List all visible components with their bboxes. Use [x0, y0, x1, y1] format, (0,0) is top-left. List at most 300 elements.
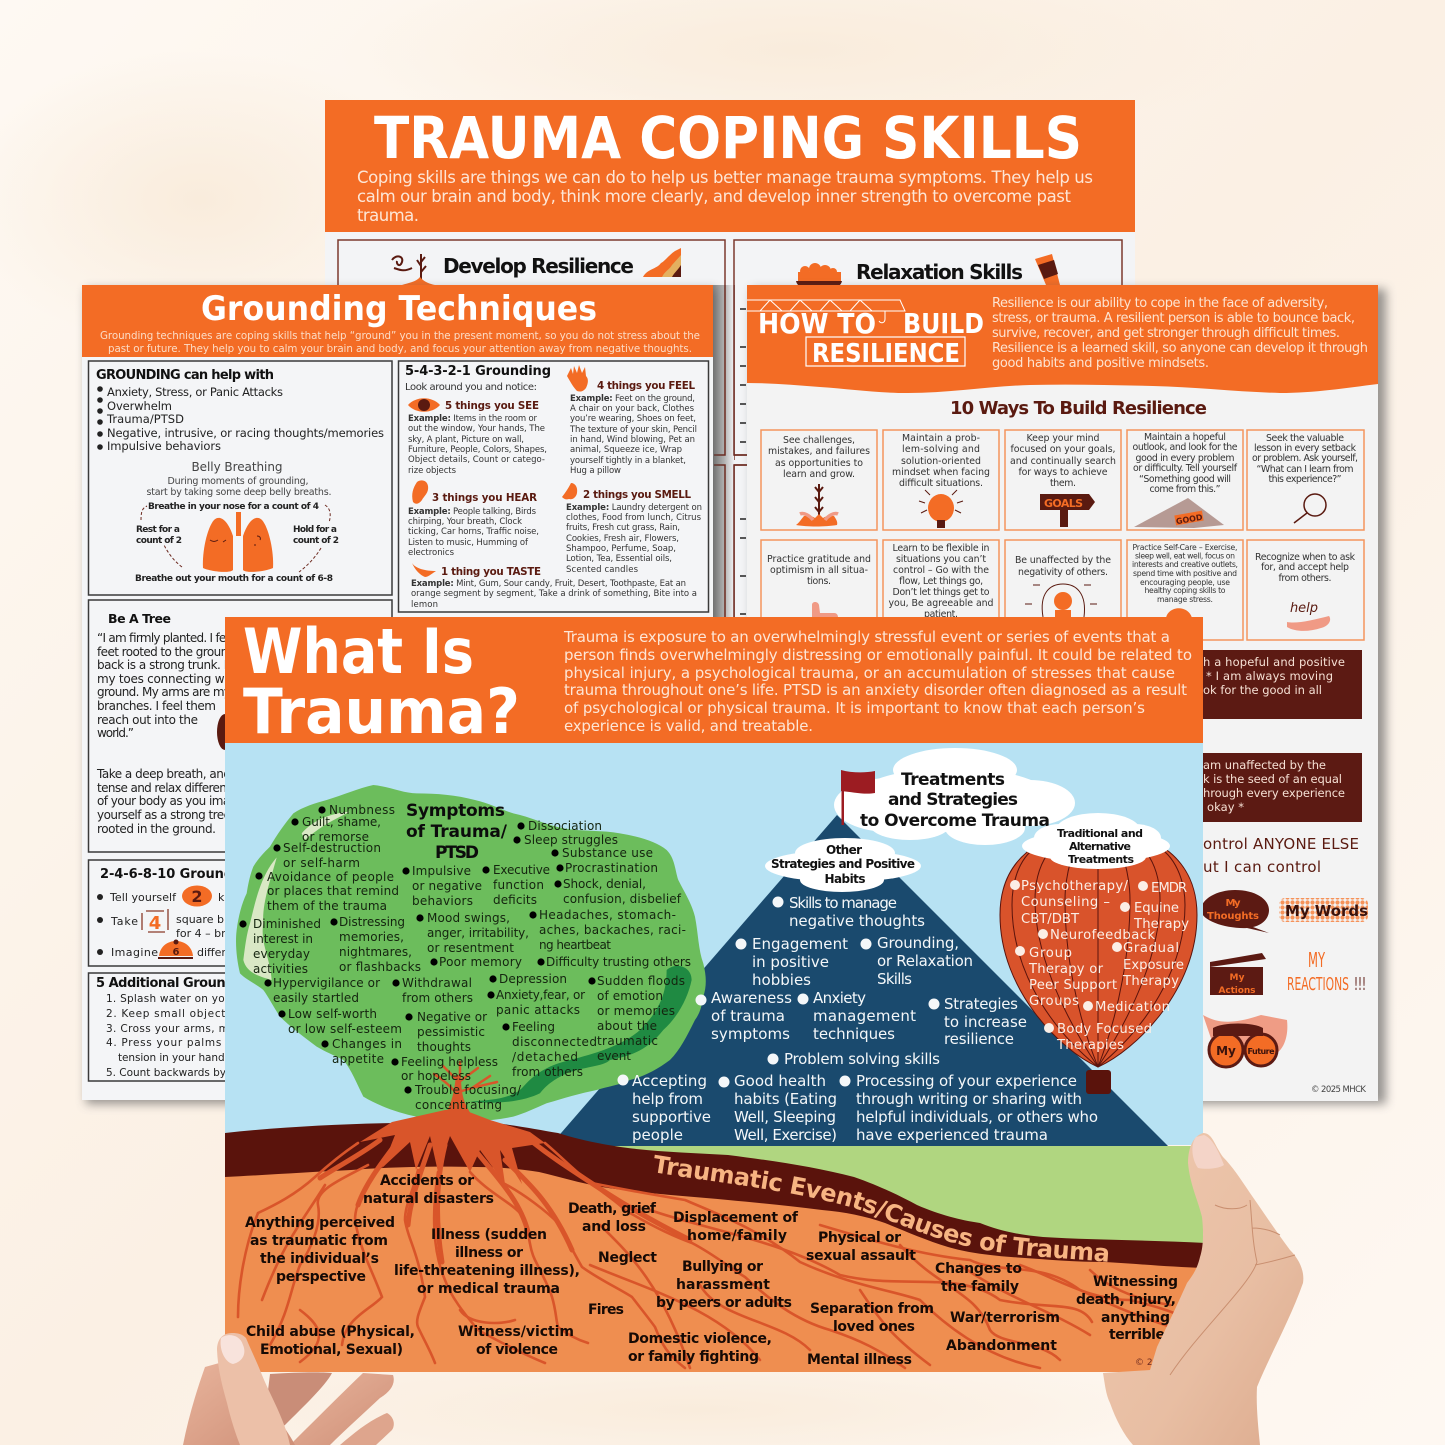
icon: tree silhouette — [217, 714, 233, 750]
panel: 2-4-6-8-10 grounding: square breathing — [176, 913, 270, 926]
causes text: Bullying or — [682, 1259, 763, 1275]
intro text: Grounding techniques are coping skills that help “ground” you in the present moment, so you do not stress about the — [100, 330, 700, 342]
tree text: Procrastination — [565, 861, 658, 875]
icon: my thoughts: Thoughts — [1207, 911, 1259, 922]
tree text: easily startled — [273, 991, 359, 1005]
icon: my words — [1279, 898, 1368, 922]
tree text: /detached — [512, 1050, 578, 1064]
causes text: or family fighting — [628, 1349, 759, 1365]
tree text: activities — [253, 962, 308, 976]
tree heading: of Trauma/ — [406, 822, 508, 842]
cloud: treatments heading: and Strategies — [888, 790, 1018, 810]
causes text: Abandonment — [946, 1338, 1057, 1354]
icon: my reactions — [1287, 948, 1366, 995]
card text: good in every problem — [1136, 453, 1234, 464]
shadow gap — [713, 285, 734, 620]
icon: goals sign: GOALS — [1044, 497, 1083, 510]
causes text: death, injury, — [1076, 1292, 1176, 1308]
causes text: as traumatic from — [250, 1233, 388, 1249]
mountain text: Accepting — [632, 1072, 707, 1090]
panel: be a tree: tense and relax different parts — [97, 781, 262, 795]
branches — [434, 1062, 497, 1095]
panel: 2-4-6-8-10 grounding: for 4 – breaths — [176, 927, 256, 940]
intro text: Resilience is a learned skill, so anyone can develop it through — [992, 341, 1368, 356]
mountain text — [618, 894, 1098, 1144]
causes text: Emotional, Sexual) — [260, 1342, 403, 1358]
causes text: Witnessing — [1093, 1274, 1178, 1290]
tree text: Difficulty trusting others — [546, 955, 691, 969]
balloon cloud: Traditional and — [1057, 827, 1143, 840]
tree text: Guilt, shame, — [302, 815, 381, 829]
icon: cloche 6 — [158, 940, 193, 959]
causes text: harassment — [676, 1277, 770, 1293]
tree text: Dissociation — [528, 819, 602, 833]
card text: Seek the valuable — [1266, 433, 1344, 444]
causes text: sexual assault — [806, 1248, 916, 1264]
mountain text: have experienced trauma — [856, 1126, 1048, 1144]
causes text: anything — [1101, 1310, 1170, 1326]
cloud: treatments heading: Treatments — [901, 770, 1005, 790]
mountain text: help from — [632, 1090, 703, 1108]
card text: Learn to be flexible in — [892, 543, 990, 554]
mountain text: Awareness — [711, 989, 792, 1007]
tree canopy — [236, 785, 706, 1121]
belly breathing: start by taking some deep belly breaths. — [146, 487, 332, 498]
curved heading: traumatic events: Traumatic Events/Causes of Trauma — [654, 1154, 1108, 1262]
icon: speech bubble 2 — [182, 886, 212, 906]
card text: Don’t let things get to — [892, 587, 990, 598]
balloon text: Exposure — [1123, 958, 1184, 973]
icon: light bulb — [919, 490, 963, 528]
balloon text: CBT/DBT — [1021, 912, 1080, 927]
card text: or problem. Ask yourself, — [1252, 453, 1358, 464]
card text: interests and creative outlets, — [1132, 560, 1238, 569]
card text: lesson in every setback — [1254, 443, 1357, 454]
heading: 5-4-3-2-1 Grounding — [405, 364, 551, 379]
icon: binoculars my future: Future — [1248, 1047, 1275, 1056]
card text: spend time with positive and — [1133, 569, 1237, 578]
belly breathing: Breathe in your nose for a count of 4 — [148, 502, 319, 512]
feel — [567, 365, 697, 476]
canopy highlight — [243, 857, 277, 980]
card text: Recognize when to ask — [1255, 552, 1356, 563]
icon: bath — [796, 263, 842, 287]
icon: my actions clapperboard: My — [1230, 973, 1245, 983]
knuckle creases — [1170, 1200, 1295, 1375]
tick marks — [740, 309, 746, 614]
tree text: Anxiety,fear, or — [496, 988, 585, 1002]
mountain text: symptoms — [711, 1025, 790, 1043]
causes text: Illness (sudden — [431, 1227, 547, 1243]
causes text: terrible — [1109, 1327, 1165, 1343]
icon: sprout — [392, 254, 435, 285]
intro text: good habits and positive mindsets. — [992, 356, 1209, 371]
icon: square breathing 4: 4 — [149, 913, 161, 934]
panel: be a tree: my toes connecting with the — [97, 672, 262, 686]
see: Object details, Count or catego- — [408, 455, 545, 465]
icon: stairs — [643, 248, 681, 277]
panel: develop resilience — [338, 240, 725, 460]
mountain text: in positive — [752, 953, 829, 971]
tree text: Distressing — [339, 915, 405, 929]
card text: come from this.” — [1150, 484, 1221, 495]
poster: grounding techniques — [82, 285, 713, 1100]
icon: my reactions: MY — [1308, 948, 1325, 972]
see — [408, 398, 547, 476]
tree text: Feeling — [512, 1020, 555, 1034]
panel: 5 additional grounding — [88, 973, 392, 1081]
mountain text: habits (Eating — [734, 1090, 837, 1108]
title: TRAUMA COPING SKILLS — [374, 104, 1082, 172]
mountain text: Skills to manage — [789, 894, 897, 912]
tree text: Mood swings, — [427, 911, 510, 925]
roots and trunk — [238, 1062, 1190, 1368]
header band — [82, 285, 713, 357]
title: HOW TO — [758, 307, 876, 340]
icon: my reactions: REACTIONS — [1287, 974, 1349, 995]
hot air balloon — [1000, 813, 1197, 1094]
balloon cloud — [1022, 813, 1170, 869]
tree text: or places that remind — [267, 884, 399, 898]
header band — [225, 615, 1203, 748]
see: Furniture, People, Colors, Shapes, — [408, 445, 547, 455]
card text: for, and accept help — [1261, 562, 1349, 573]
cloud: other strategies: Other — [826, 843, 862, 857]
mountain text: Anxiety — [813, 989, 866, 1007]
title — [243, 615, 520, 748]
mountain text: supportive — [632, 1108, 711, 1126]
smell: Scented candles — [566, 565, 639, 575]
smell: clothes, Food from lunch, Citrus — [566, 513, 702, 523]
icon: word pile good — [1134, 498, 1224, 528]
icon: my actions clapperboard: Actions — [1218, 986, 1256, 996]
intro text — [100, 330, 700, 355]
tree text: Substance use — [562, 846, 653, 860]
intro text: of psychological or physical trauma. It is important to know that each person’s — [564, 699, 1145, 717]
belly breathing: Belly Breathing — [192, 460, 282, 474]
intro text — [563, 628, 1192, 735]
right hand — [1103, 1133, 1303, 1445]
tree text — [239, 801, 691, 1112]
card text: or difficulty. Tell yourself — [1133, 463, 1238, 474]
panel: be a tree: world.” — [97, 726, 134, 740]
hear: ticking, Car horns, Traffic noise, — [408, 527, 539, 537]
tree text: confusion, disbelief — [563, 892, 682, 906]
poster: trauma coping skills — [325, 100, 1135, 630]
card text: tions. — [807, 576, 831, 587]
panel: be a tree: rooted in the ground. — [97, 822, 216, 836]
causes text: War/terrorism — [950, 1310, 1060, 1326]
panel: 5 additional grounding: 2. Keep small objects with you — [106, 1008, 286, 1020]
bullet list: Negative, intrusive, or racing thoughts/memories — [107, 426, 384, 440]
heading: 10 ways: 10 Ways To Build Resilience — [950, 398, 1207, 419]
icon: talk bubble — [1166, 608, 1192, 618]
poster: what is trauma — [225, 615, 1203, 1372]
control statement: ontrol ANYONE ELSE — [1203, 835, 1359, 853]
panel: lower row outlines — [338, 465, 1122, 630]
bullet list: Overwhelm — [107, 399, 172, 413]
smell: Shampoo, Perfume, Soap, — [566, 544, 676, 554]
balloon text: Group — [1029, 946, 1072, 961]
panel edge lines — [714, 285, 747, 620]
soil orange — [225, 1142, 1203, 1372]
tree text: nightmares, — [339, 945, 412, 959]
card text: See challenges, — [783, 435, 855, 446]
card text: “What can I learn from — [1256, 464, 1354, 475]
panel: 5 additional grounding: 5. Count backwards by 7 — [106, 1067, 236, 1079]
feel: The texture of your skin, Pencil — [569, 425, 697, 435]
causes text: Displacement of — [673, 1210, 799, 1226]
tree text: from others — [402, 991, 473, 1005]
intro text: Coping skills are things we can do to help us better manage trauma symptoms. They help us — [357, 168, 1093, 187]
affirmation banner 2: k is the seed of an equal — [1203, 772, 1342, 786]
feel: animal, Squeeze ice, Wrap — [570, 445, 682, 455]
hear: Example: People talking, Birds — [408, 507, 537, 517]
tree text: memories, — [339, 930, 404, 944]
intro text: experience is valid, and treatable. — [564, 717, 813, 735]
hear — [408, 480, 539, 558]
card text: Practice gratitude and — [767, 554, 871, 565]
icon: help hand: help — [1290, 601, 1318, 616]
flag — [841, 770, 875, 825]
panel: 5-4-3-2-1 grounding — [398, 361, 708, 612]
land green — [560, 1146, 1203, 1270]
card text: learn and grow. — [783, 469, 855, 480]
tree text: everyday — [253, 947, 310, 961]
card text: Keep your mind — [1026, 433, 1100, 444]
header band — [747, 285, 1378, 393]
cloud: treatments heading — [834, 748, 1075, 845]
thick upper roots — [320, 1140, 690, 1262]
tree text: or hopeless — [401, 1069, 471, 1083]
causes text: or medical trauma — [417, 1281, 560, 1297]
belly breathing — [135, 460, 339, 584]
causes text: Changes to — [935, 1261, 1022, 1277]
causes text: loved ones — [833, 1319, 915, 1335]
intro text — [992, 296, 1368, 371]
panel: be a tree: feet rooted to the ground. My — [97, 645, 258, 659]
causes text — [245, 1173, 1178, 1368]
balloon text: Neurofeedback — [1050, 928, 1155, 943]
intro text: Resilience is our ability to cope in the face of adversity, — [992, 296, 1328, 311]
cloud: other strategies: Strategies and Positive — [771, 857, 915, 871]
icon: magnifying glass — [1294, 494, 1326, 523]
tree heading — [406, 801, 508, 863]
tree bullets — [239, 806, 596, 1094]
causes text: Mental illness — [807, 1352, 912, 1368]
belly breathing: During moments of grounding, — [168, 476, 308, 487]
tree text: behaviors — [412, 894, 473, 908]
bullet list — [97, 385, 384, 453]
balloon text: Gradual — [1123, 941, 1179, 956]
panel: 5 additional grounding: 5 Additional Grounding — [96, 976, 256, 991]
panel: relaxation skills — [734, 240, 1122, 460]
tree text: or memories — [597, 1004, 675, 1018]
control statement: ut I can control — [1203, 858, 1321, 876]
mountain text: helpful individuals, or others who — [856, 1108, 1098, 1126]
belly breathing: Breathe out your mouth for a count of 6-8 — [135, 574, 333, 584]
balloon text: Body Focused — [1057, 1022, 1152, 1037]
card text: them. — [1050, 478, 1076, 489]
tree text: aches, backaches, raci- — [539, 923, 686, 937]
tree text: appetite — [332, 1052, 384, 1066]
mountain text: to increase — [944, 1013, 1027, 1031]
see: out the window, Your hands, The — [408, 424, 545, 434]
tree text: function — [493, 878, 544, 892]
card text: healthy coping skills to — [1144, 586, 1226, 595]
causes text: the individual’s — [260, 1251, 379, 1267]
causes text: Accidents or — [380, 1173, 474, 1189]
affirmation banner 2: hrough every experience — [1203, 786, 1345, 800]
tree text: of emotion — [597, 989, 663, 1003]
balloon text: Equine — [1134, 901, 1179, 916]
affirmation banner 2: am unaffected by the — [1203, 758, 1326, 772]
panel: 2-4-6-8-10 grounding: different things — [197, 946, 282, 959]
mountain text: Strategies — [944, 995, 1018, 1013]
see: rize objects — [408, 466, 457, 476]
root crown — [360, 1110, 545, 1184]
heading: GROUNDING can help with — [96, 368, 274, 383]
mountain text: Engagement — [752, 935, 848, 953]
causes text: Fires — [588, 1302, 624, 1318]
panel: be a tree: Be A Tree — [108, 611, 171, 626]
tree text: Self-destruction — [283, 841, 381, 855]
soil brown band — [225, 1121, 1206, 1268]
cloud: other strategies: Habits — [824, 872, 866, 886]
copyright: © 2025 MHCK — [1311, 1085, 1366, 1095]
icon: lotion tube — [1035, 254, 1060, 285]
causes text: Domestic violence, — [628, 1331, 772, 1347]
panel: 5 additional grounding: 3. Cross your arms, make a — [106, 1023, 259, 1035]
card text: sleep well, eat well, focus on — [1135, 552, 1235, 560]
causes text: perspective — [276, 1269, 366, 1285]
sky — [225, 743, 1203, 1145]
tree text: Avoidance of people — [267, 870, 394, 884]
feel: yourself tightly in a blanket, — [570, 456, 686, 466]
hear: Listen to music, Humming of — [408, 538, 529, 548]
tree heading: PTSD — [435, 843, 479, 863]
balloon text: Therapy — [1133, 917, 1189, 932]
tree text: ng heartbeat — [539, 938, 611, 952]
hear: electronics — [408, 548, 455, 558]
card text: mistakes, and failures — [768, 446, 870, 457]
copyright: © 20 — [1135, 1358, 1159, 1368]
card text: mindset when facing — [892, 467, 990, 478]
panel: 2-4-6-8-10 grounding: Take — [110, 915, 138, 928]
tree text: Withdrawal — [402, 976, 472, 990]
tree text: anger, irritability, — [427, 926, 529, 940]
title — [747, 300, 984, 369]
panel: be a tree: reach out into the — [97, 713, 198, 727]
card text: patient. — [924, 609, 958, 620]
feel: A chair on your back, Clothes — [570, 404, 695, 414]
tree text: Impulsive — [412, 864, 471, 878]
header band — [325, 100, 1135, 232]
intro text: past or future. They help you to calm your brain and body, and focus your attention away from negative thoughts. — [108, 343, 692, 355]
long roots — [238, 1143, 1190, 1368]
icon: sprout hands — [796, 484, 838, 526]
icon: person circle — [1025, 584, 1097, 619]
tree text: or self-harm — [283, 856, 360, 870]
canopy shade — [470, 966, 692, 1103]
causes text: Witness/victim — [458, 1324, 574, 1340]
card text: flow, Let things go, — [899, 576, 983, 587]
heading: Relaxation Skills — [856, 260, 1023, 284]
causes text: of violence — [476, 1342, 558, 1358]
tree text: deficits — [493, 893, 537, 907]
bullet list: Anxiety, Stress, or Panic Attacks — [107, 385, 283, 399]
taste — [411, 563, 697, 610]
tree text: interest in — [253, 932, 313, 946]
affirmation banner 1 — [1150, 650, 1362, 719]
card text: Maintain a hopeful — [1144, 432, 1226, 443]
title: What Is — [243, 615, 474, 688]
feel: 4 things you FEEL — [597, 380, 695, 392]
icon: my reactions: !!! — [1354, 974, 1366, 995]
panel: 5 additional grounding: tension in your hands — [118, 1052, 230, 1064]
tree text: from others — [512, 1065, 583, 1079]
affirmation banner 2 — [1150, 753, 1362, 822]
poster shadows — [86, 289, 1386, 1104]
title: Trauma? — [243, 675, 520, 748]
belly breathing: count of 2 — [293, 536, 339, 546]
mountain — [555, 815, 1168, 1146]
feel: Example: Feet on the ground, — [570, 394, 695, 404]
tree text: disconnected — [512, 1035, 597, 1049]
icon: binoculars my future: My — [1216, 1044, 1236, 1058]
panel: be a tree: Take a deep breath, and — [96, 767, 231, 781]
tree text: pessimistic — [417, 1025, 485, 1039]
icon: help hand — [1287, 601, 1330, 631]
panel: grounding can help with — [88, 361, 392, 595]
mountain text: Well, Exercise) — [734, 1126, 837, 1144]
balloon text — [1010, 879, 1189, 1053]
affirmation banner 1: h a hopeful and positive — [1203, 655, 1345, 669]
icon: cloche 6: 6 — [173, 947, 180, 958]
card text: for ways to achieve — [1018, 467, 1108, 478]
balloon text: Peer Support — [1029, 978, 1117, 993]
basket — [1086, 1070, 1111, 1094]
mountain text: Good health — [734, 1072, 826, 1090]
causes text: natural disasters — [363, 1191, 494, 1207]
causes text: and loss — [582, 1219, 646, 1235]
smell: Cookies, Fresh air, Flowers, — [566, 534, 679, 544]
bullet list: Trauma/PTSD — [106, 412, 184, 426]
balloon cloud: Alternative — [1069, 840, 1131, 853]
card text: from others. — [1278, 573, 1332, 584]
smell — [562, 483, 702, 575]
tree text: Negative or — [417, 1010, 487, 1024]
card text: control – Go with the — [893, 565, 989, 576]
heading: Develop Resilience — [443, 254, 634, 278]
panel: be a tree: back is a strong trunk. I feel — [97, 658, 251, 672]
icon: my actions clapperboard — [1210, 953, 1266, 996]
tree text: or low self-esteem — [288, 1022, 402, 1036]
balloon text: Groups — [1029, 994, 1079, 1009]
card text: difficult situations. — [899, 478, 983, 489]
card text: Practice Self-Care – Exercise, — [1132, 543, 1238, 552]
panel: 5 additional grounding: 1. Splash water on your face — [106, 993, 263, 1005]
mountain text: techniques — [813, 1025, 895, 1043]
icon: my thoughts — [1201, 890, 1269, 933]
belly breathing: count of 2 — [136, 536, 182, 546]
affirmation banner 1: ok for the good in all — [1203, 683, 1322, 697]
mountain text: people — [632, 1126, 683, 1144]
icon: square breathing 4 — [142, 909, 168, 934]
balloon text: Medication — [1095, 1000, 1170, 1015]
balloon cloud: Treatments — [1068, 853, 1134, 866]
icon: goals sign — [1040, 494, 1095, 527]
